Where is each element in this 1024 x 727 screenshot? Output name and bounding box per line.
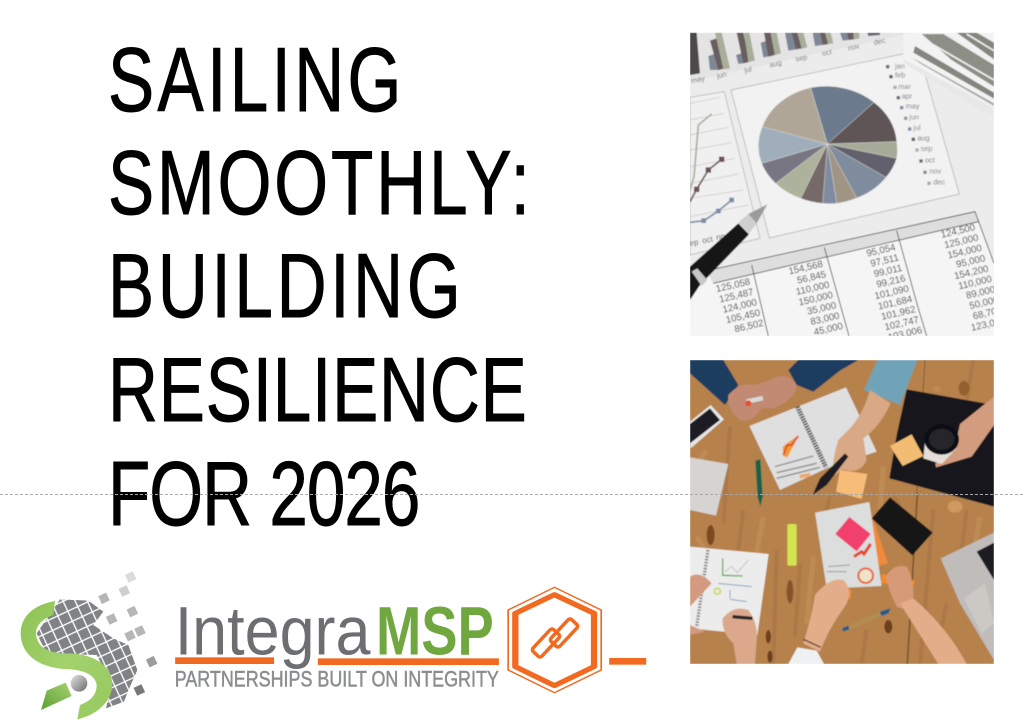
tagline: PARTNERSHIPS BUILT ON INTEGRITY [175,667,499,692]
data table: 101,684 [877,294,914,313]
line chart axis labels [690,234,726,248]
bar chart axis labels: aug [769,58,782,69]
left notebook with chart [690,547,769,635]
pie legend: jan [894,61,905,70]
highlighter [787,524,797,566]
spiral notebook [749,387,877,490]
data table: 125,058 [715,277,751,295]
title: RESILIENCE [108,340,527,441]
pie legend: jun [908,112,919,121]
pie legend: feb [895,70,905,79]
left hand at edge [690,574,712,635]
bar chart axis labels: may [690,74,706,85]
data table: 86,502 [733,318,765,335]
icon: chain link [531,618,579,658]
data table: 45,000 [813,321,844,338]
data table: 154,000 [947,243,983,261]
data table: 124,000 [722,297,758,316]
left notepad [690,457,728,516]
bar chart axis labels: oct [821,47,833,58]
dashed guide line [0,494,1024,496]
laptop [941,533,994,660]
data table: 89,000 [965,284,996,302]
centre notepad [815,502,888,589]
data table: 95,054 [865,242,897,260]
pie legend: oct [925,156,935,165]
logo: pixel S mark [21,571,157,719]
data table: 110,000 [957,274,993,292]
bar chart axis labels [691,38,886,84]
bar chart axis labels: jul [743,64,753,75]
money [903,32,994,106]
pen [690,204,767,300]
phone top-left [690,405,724,448]
data table: 105,450 [725,308,761,326]
data table: 83,000 [809,311,841,328]
data table: 154,568 [788,259,824,277]
writing hand lower left [723,609,757,664]
orange highlighter hand [788,579,852,664]
data table: 154,200 [953,264,990,282]
title: SMOOTHLY: [108,133,530,234]
pie legend: nov [929,166,941,175]
data table: 35,000 [806,300,837,318]
data table: 101,090 [874,284,910,302]
pie legend: mar [898,82,912,91]
MSP wordmark: MSP [376,594,494,669]
pie legend: may [906,102,920,111]
logo: Integra MSP wordmark [175,587,646,693]
data table: 50,000 [968,295,1000,312]
icon: hexagon badge [508,587,601,693]
data table: 101,962 [880,304,917,323]
bar chart axis labels: dec [873,36,887,47]
photo: financial charts [689,33,1006,344]
top bar chart [690,32,883,76]
data table: 68,700 [972,305,1003,322]
data table: 124,500 [940,222,976,241]
data table: 125,487 [718,287,755,305]
green pen [755,459,763,507]
line chart [690,92,760,255]
data table: 150,000 [798,290,834,308]
coffee cup and hand [923,397,994,467]
data table [690,212,1006,344]
data table: 102,747 [884,315,920,333]
black folder [889,389,994,507]
title: SAILING [108,30,401,131]
orange marker and hand [881,566,967,664]
title: BUILDING [108,236,461,337]
wood table [690,360,994,664]
pie legend: apr [902,92,913,101]
pie chart [758,86,897,204]
Integra wordmark: Integra [175,594,371,669]
pie legend: aug [917,133,930,142]
bar chart axis labels: nov [847,41,861,53]
title [108,30,530,545]
data table: 56,845 [796,269,827,287]
data table: 99,011 [873,263,903,280]
bar chart axis labels: sep [795,52,808,64]
data table: 123,000 [970,315,1006,334]
ballpoint pen [842,608,891,631]
data table: 125,000 [943,233,980,251]
pie legend: sep [921,144,932,153]
data table: 103,006 [887,325,923,344]
black phone [872,497,933,555]
line chart axis labels: ep [689,237,700,248]
sticky notes [890,434,923,466]
pie legend: jul [912,123,921,132]
bar chart axis labels: jun [715,69,727,80]
data table: 95,000 [955,253,986,271]
pie legend: dec [933,177,945,186]
denim sleeve and hand [833,360,917,475]
data table: 99,216 [875,273,907,291]
line chart axis labels: oct [701,234,714,245]
black pen [813,453,848,495]
orange rules [175,657,646,665]
title: FOR 2026 [108,444,420,545]
top-left person [690,360,858,421]
pie panel frame [731,51,959,238]
data table: 97,511 [869,253,900,270]
photo: team meeting around table [690,360,994,664]
line chart axis labels: no [715,231,726,242]
pie legend [886,61,945,186]
data table: 110,000 [795,280,831,298]
